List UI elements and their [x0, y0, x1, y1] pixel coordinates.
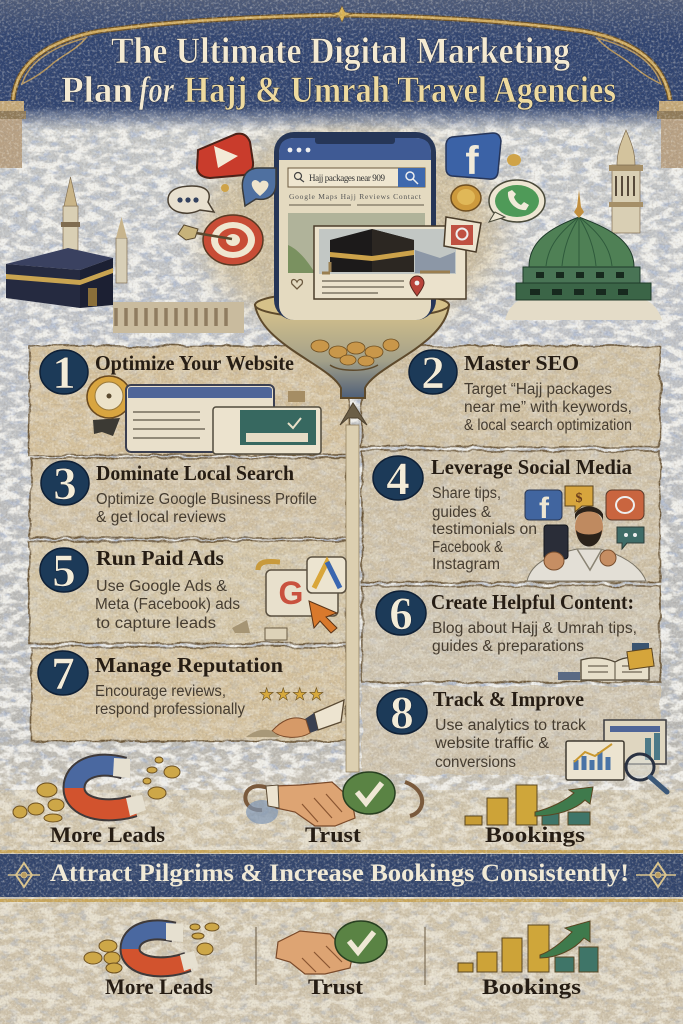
- badge 4: 4: [386, 453, 410, 505]
- text 4: [432, 485, 537, 573]
- icon: bar chart with arrow: [465, 785, 593, 825]
- badge 6: 6: [389, 588, 413, 640]
- text 2: & local search optimization: [464, 417, 632, 434]
- illustration: pilgrim with phone and social icons: f: [539, 492, 550, 525]
- text 7: respond professionally: [95, 701, 245, 718]
- lower banner gold rules: [0, 850, 683, 902]
- panel 3: [31, 458, 347, 538]
- illustration: pilgrim with phone and social icons: $: [576, 491, 582, 506]
- icon: WhatsApp: [489, 180, 545, 222]
- heading 3: Dominate Local Search: [96, 461, 294, 485]
- panels: [29, 346, 660, 775]
- icon: Facebook: f: [465, 139, 479, 183]
- text 2: Target “Hajj packages: [464, 381, 612, 398]
- icon: magnet and coins: [84, 923, 219, 973]
- dividers: [256, 927, 425, 985]
- label: Trust: [305, 822, 362, 847]
- text 7: Encourage reviews,: [95, 683, 226, 700]
- panel 4: [362, 451, 660, 582]
- text 8: [434, 717, 586, 771]
- panel 6: [362, 586, 660, 682]
- label: Bookings: [485, 822, 585, 847]
- benefit: trust (lower): [276, 921, 387, 999]
- text 5: Use Google Ads &: [96, 578, 228, 595]
- text 4: Facebook &: [432, 539, 504, 556]
- illustration: pilgrim with phone and social icons: [525, 486, 646, 581]
- slogan banner: [0, 854, 683, 897]
- phone with search page: Hajj packages near 909: [309, 173, 386, 183]
- panel 8: [362, 686, 660, 775]
- step 7: [38, 648, 344, 737]
- illustration: Google Ads cards and cursor: [232, 557, 346, 640]
- text 4: testimonials on: [432, 521, 537, 538]
- benefit: more leads (lower): [84, 923, 219, 999]
- phone with search page: Google Maps Hajj Reviews Contact: [289, 192, 422, 201]
- icon: chat bubble with dots: [168, 186, 214, 213]
- ornament: left diamond: [8, 863, 40, 887]
- badge 7: [38, 648, 88, 700]
- badge 8: 8: [390, 687, 414, 739]
- heading 4: Leverage Social Media: [431, 455, 632, 479]
- title: for: [139, 70, 174, 111]
- badge 2: 2: [421, 347, 445, 399]
- badge 8: [377, 687, 427, 739]
- illustration: handshake: [246, 700, 344, 737]
- text 5: [95, 578, 240, 632]
- text 4: Instagram: [432, 556, 500, 573]
- badge 1: 1: [52, 347, 76, 399]
- label: More Leads: [105, 974, 213, 999]
- heading 7: Manage Reputation: [95, 653, 283, 677]
- illustration: open book with note: [558, 643, 654, 680]
- heading 2: Master SEO: [464, 351, 579, 375]
- heading 1: Optimize Your Website: [95, 351, 294, 375]
- badge 6: [376, 588, 426, 640]
- label: More Leads: [50, 822, 165, 847]
- title: [61, 31, 616, 111]
- badge 3: 3: [53, 458, 77, 510]
- text 4: Share tips,: [432, 485, 501, 502]
- step 2: [409, 347, 632, 434]
- icon: small red chat tile: [444, 217, 481, 252]
- title: Hajj & Umrah Travel Agencies: [184, 70, 616, 111]
- icon: coin: [221, 154, 521, 211]
- benefit: bookings (lower): [458, 921, 598, 999]
- text 5: Meta (Facebook) ads: [95, 596, 240, 613]
- text 8: website traffic &: [434, 735, 550, 752]
- step 4: [373, 453, 646, 581]
- badge 4: [373, 453, 423, 505]
- title: The Ultimate Digital Marketing: [111, 31, 570, 72]
- benefit: more leads (upper): [13, 757, 180, 847]
- icon: handshake with check: [276, 921, 387, 974]
- icon: target with arrow: [178, 215, 263, 265]
- phone with search page: [274, 132, 436, 320]
- illustration: Kaaba and Masjid al-Haram: [6, 177, 244, 333]
- coins in funnel: [311, 339, 399, 366]
- text 8: conversions: [435, 754, 516, 771]
- panel mottling: [29, 346, 660, 776]
- benefit: bookings (upper): [465, 785, 593, 847]
- beige glow behind phone: [200, 130, 500, 330]
- icon: handshake with check: [245, 772, 422, 826]
- panel 1: [29, 346, 348, 455]
- step 8: [377, 687, 667, 792]
- text 3: [96, 491, 317, 526]
- illustration: analytics dashboard and magnifier: [566, 720, 667, 792]
- text 7: [95, 683, 245, 718]
- heading 8: Track & Improve: [433, 687, 584, 711]
- title: Plan: [61, 70, 133, 111]
- text 3: & get local reviews: [96, 509, 226, 526]
- growth arrow: [340, 403, 367, 772]
- step 3: [41, 458, 317, 526]
- text 8: Use analytics to track: [435, 717, 586, 734]
- illustration: green dome mosque: [505, 130, 662, 320]
- left column: [0, 101, 26, 168]
- panel 2: [362, 346, 660, 447]
- step 5: [40, 545, 346, 640]
- heading 5: Run Paid Ads: [96, 546, 224, 570]
- title banner background: [0, 0, 683, 130]
- text 5: to capture leads: [96, 615, 216, 632]
- icon: YouTube: [197, 134, 253, 178]
- badge 3: [41, 458, 89, 510]
- icon: Facebook: [446, 133, 501, 183]
- badge 5: 5: [52, 545, 76, 597]
- step 6: [376, 588, 654, 680]
- panel 5: [29, 541, 347, 643]
- label: Bookings: [482, 974, 581, 999]
- illustration: Google Ads cards and cursor: G: [279, 575, 303, 611]
- badge 1: [40, 347, 88, 399]
- right column: [657, 101, 683, 168]
- icon: bar chart with arrow: [458, 921, 598, 972]
- ornament: right diamond: [636, 863, 676, 887]
- funnel: [255, 291, 449, 398]
- text 2: near me” with keywords,: [464, 399, 632, 416]
- photo card with Kaaba: [292, 226, 466, 299]
- text 2: [464, 381, 632, 434]
- label: Trust: [308, 974, 364, 999]
- icon: stars: ★★★★: [259, 685, 324, 705]
- step 1: [40, 347, 321, 454]
- badge 2: [409, 347, 457, 399]
- icon: magnet and coins: [13, 757, 180, 822]
- ornamental arch: [13, 15, 670, 100]
- text 3: Optimize Google Business Profile: [96, 491, 317, 508]
- ornament: star: [332, 6, 352, 22]
- slogan: Attract Pilgrims & Increase Bookings Consistently!: [50, 860, 629, 887]
- icon: chat bubble with heart: [242, 168, 276, 206]
- text 6: [432, 620, 637, 655]
- panel 7: [31, 647, 347, 741]
- benefit: trust (upper): [245, 772, 422, 847]
- text 6: guides & preparations: [432, 638, 584, 655]
- text 6: Blog about Hajj & Umrah tips,: [432, 620, 637, 637]
- text 4: guides &: [432, 504, 492, 521]
- heading 6: Create Helpful Content:: [431, 590, 634, 614]
- badge 5: [40, 545, 88, 597]
- illustration: website windows and speed gauge: [87, 376, 321, 454]
- badge 7: 7: [51, 648, 75, 700]
